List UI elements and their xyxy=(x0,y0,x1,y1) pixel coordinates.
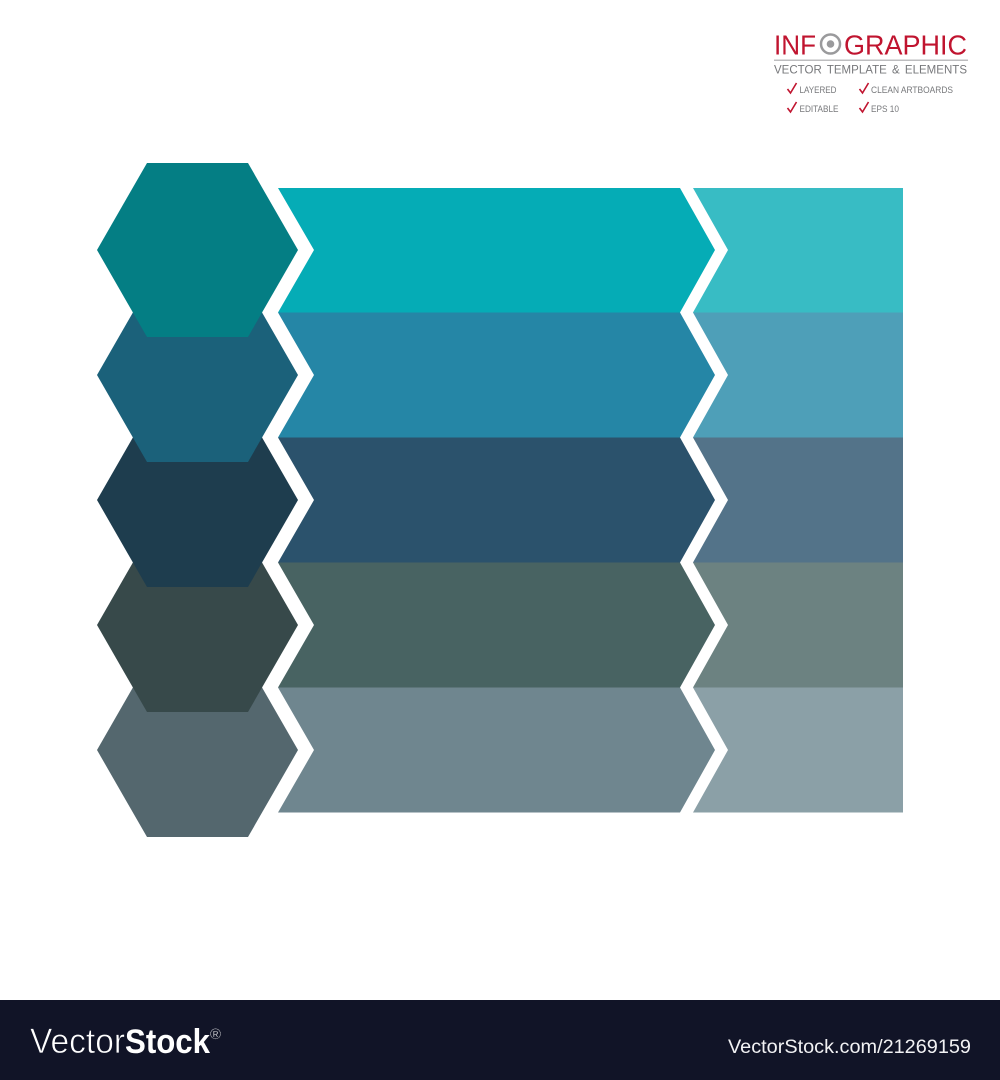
row 4 right panel xyxy=(693,562,903,688)
row 5 xyxy=(97,663,903,837)
row 4 hexagon xyxy=(97,538,298,712)
row 2 right panel xyxy=(693,312,903,438)
logo title xyxy=(774,30,967,60)
logo title: GRAPHIC xyxy=(844,30,967,60)
row 5 right panel xyxy=(693,688,903,812)
row 5 hexagon xyxy=(97,663,298,837)
row 3 right panel xyxy=(693,438,903,562)
logo title: INF xyxy=(774,30,816,60)
row 5 middle arrow xyxy=(278,688,715,812)
row 2 xyxy=(97,288,903,462)
row 1 middle arrow xyxy=(278,188,715,312)
footer logo: Stock xyxy=(125,1023,210,1061)
footer logo xyxy=(30,1022,221,1061)
row 3 middle arrow xyxy=(278,438,715,562)
row 4 middle arrow xyxy=(278,562,715,688)
row 1 right panel xyxy=(693,188,903,312)
footer bar xyxy=(0,1000,1000,1080)
footer logo: ® xyxy=(210,1026,221,1043)
row 2 hexagon xyxy=(97,288,298,462)
check list: EPS 10 xyxy=(871,104,899,114)
row 1 hexagon xyxy=(97,163,298,337)
logo: infographic template badge xyxy=(774,30,968,114)
row 2 middle arrow xyxy=(278,312,715,438)
row 4 xyxy=(97,538,903,712)
check list xyxy=(788,83,953,114)
footer logo: Vector xyxy=(30,1022,125,1061)
footer url: VectorStock.com/21269159 xyxy=(728,1036,971,1058)
check list: CLEAN ARTBOARDS xyxy=(871,85,953,95)
logo subtitle: VECTOR TEMPLATE & ELEMENTS xyxy=(774,64,967,76)
check list: LAYERED xyxy=(800,85,837,95)
row 3 xyxy=(97,413,903,587)
check list: EDITABLE xyxy=(800,104,838,114)
row 3 hexagon xyxy=(97,413,298,587)
row 1 xyxy=(97,163,903,337)
